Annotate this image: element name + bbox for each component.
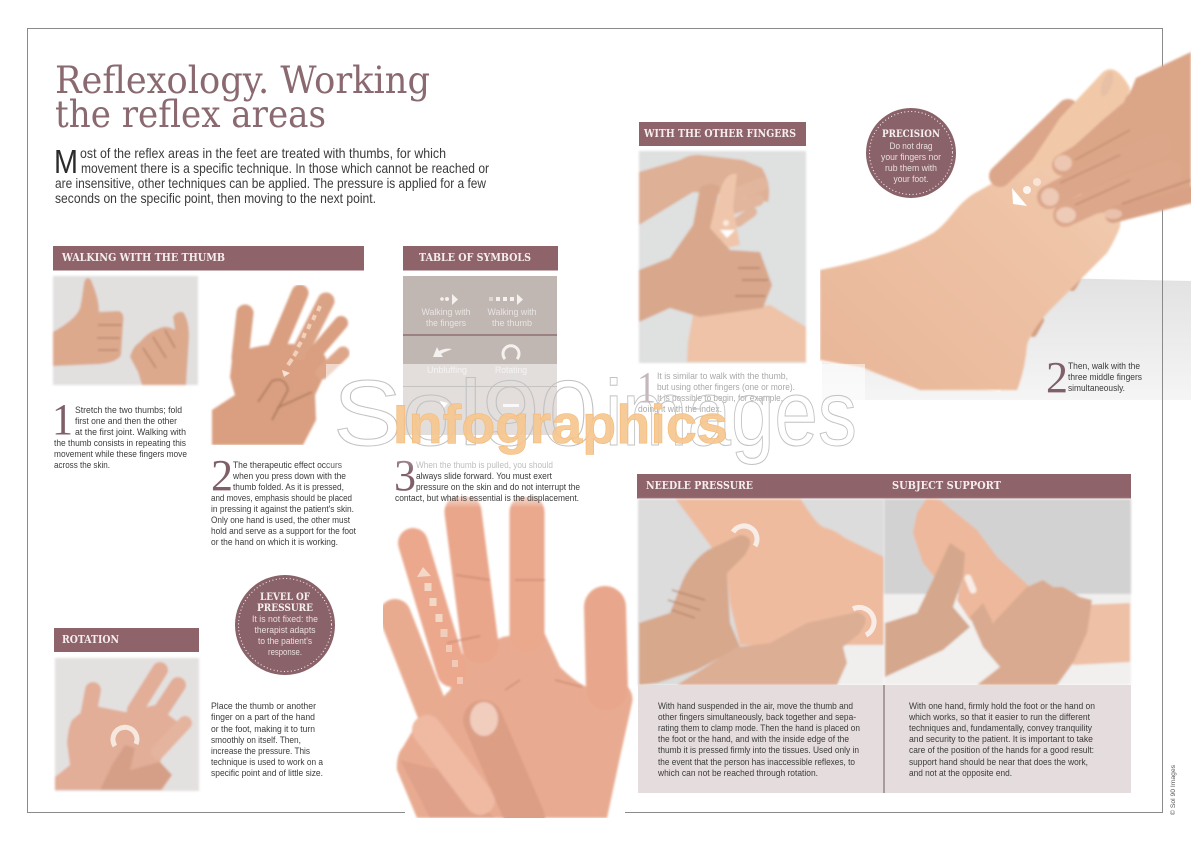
step 2: walk with the three middle fingers: three middle fingers xyxy=(1068,372,1142,383)
step 1: stretch the thumbs: 1 xyxy=(52,395,73,444)
step 1: stretch the thumbs: at the first joint. Walking with xyxy=(75,427,186,438)
callout: level of pressure: PRESSURE xyxy=(257,603,313,614)
heading: table of symbols xyxy=(403,246,558,270)
intro text block: movement there is a specific technique. In those which cannot be reached or xyxy=(81,161,489,176)
panel: table of symbols xyxy=(403,276,557,435)
label: walking with the thumb: the thumb xyxy=(492,318,532,329)
callout: level of pressure: therapist adapts xyxy=(254,625,316,636)
heading: with the other fingers xyxy=(639,122,806,146)
callout: precision xyxy=(866,108,956,198)
callout: level of pressure xyxy=(235,575,335,675)
watermark: Sol90 images Infographics: images xyxy=(605,361,857,465)
heading bar: needle pressure and subject support xyxy=(637,474,1131,498)
photo: thumb walking on the palm xyxy=(212,293,343,445)
label: unbluffing: Unbluffing xyxy=(427,365,467,376)
label: walking with the fingers: Walking with xyxy=(422,307,470,318)
photo: subject support xyxy=(884,498,1131,685)
step 3: when the thumb is pulled: 3 xyxy=(394,451,416,500)
title xyxy=(55,59,430,136)
step 2: therapeutic effect: Only one hand is used, the other must xyxy=(211,515,350,526)
step 1: stretch the thumbs: the thumb consists in repeating this xyxy=(54,438,186,449)
step 3: when the thumb is pulled: When the thumb is pulled, you should xyxy=(416,460,553,471)
rotation text: finger on a part of the hand xyxy=(211,712,315,723)
callout: level of pressure: to the patient's xyxy=(258,636,312,647)
step 2: therapeutic effect: when you press down with the xyxy=(232,471,346,482)
photo: walking with the other fingers xyxy=(639,151,806,363)
step 3: when the thumb is pulled: always slide forward. You must exert xyxy=(416,471,552,482)
panel: needle pressure text: the foot or the hand, and with the inside edge of the xyxy=(658,734,849,745)
step 2: therapeutic effect: and moves, emphasis should be placed xyxy=(211,493,352,504)
rotation text: technique is used to work on a xyxy=(211,757,324,768)
photo: large foot with three fingers xyxy=(820,52,1191,390)
step 2: therapeutic effect xyxy=(211,451,356,548)
callout: precision: PRECISION xyxy=(882,129,940,140)
photo: rotation on the palm xyxy=(55,658,199,791)
step 1: stretch the thumbs: Stretch the two thumbs; fold xyxy=(75,405,182,416)
panel: subject support text: and security to the patient. It is important to take xyxy=(909,734,1093,745)
step 2: therapeutic effect: or the hand on which it is working. xyxy=(211,537,338,548)
heading bar: needle pressure and subject support: SUBJECT SUPPORT xyxy=(892,478,1001,492)
step 1: stretch the thumbs xyxy=(52,395,187,471)
title: the reflex areas xyxy=(55,93,326,136)
panel: needle pressure text: the event that the person has inaccessible reflexes, to xyxy=(658,757,855,768)
title: Reflexology. Working xyxy=(55,59,430,102)
intro text block xyxy=(54,143,489,206)
rotation text: specific point and of little size. xyxy=(211,768,323,779)
icon: unbluffing arrow xyxy=(433,347,452,357)
panel: subject support text: and not at the opposite end. xyxy=(909,768,1012,779)
photo: towel under the large foot xyxy=(822,278,1191,400)
step 3: when the thumb is pulled: contact, but what is essential is the displacement. xyxy=(395,493,579,504)
label: walking with the fingers xyxy=(422,307,470,329)
callout: precision: Do not drag xyxy=(890,141,932,152)
step 1: similar to walking with the thumb: doing it with the index. xyxy=(638,404,722,415)
callout: level of pressure: It is not fixed: the xyxy=(252,614,318,625)
label: walking with the thumb xyxy=(488,307,536,329)
heading: rotation: ROTATION xyxy=(62,632,119,646)
step 2: therapeutic effect: 2 xyxy=(211,451,233,500)
watermark: Sol90 images Infographics: Infographics xyxy=(393,393,728,455)
watermark: Sol90 images Infographics xyxy=(333,361,857,465)
label: walking with the fingers: the fingers xyxy=(426,318,466,329)
intro text block: ost of the reflex areas in the feet are treated with thumbs, for which xyxy=(80,146,446,161)
panel: needle pressure text: which can not be reached through rotation. xyxy=(657,768,818,779)
icon: arrow on the palm xyxy=(282,306,320,377)
icon: arrow on the foot xyxy=(1012,178,1041,206)
icon: pressure marks xyxy=(733,526,874,635)
label: rotating: Rotating xyxy=(495,365,527,376)
step 2: walk with the three middle fingers: simultaneously. xyxy=(1068,383,1125,394)
credit: © Sol 90 Images xyxy=(1169,764,1177,815)
step 2: walk with the three middle fingers: Then, walk with the xyxy=(1068,361,1140,372)
panel: subject support text: With one hand, firmly hold the foot or the hand on xyxy=(909,701,1095,712)
photo: two thumbs folded xyxy=(53,276,198,385)
panel: subject support text: techniques and, fundamentally, convey tranquility xyxy=(909,723,1092,734)
intro text block: seconds on the specific point, then moving to the next point. xyxy=(55,191,376,206)
step 3: when the thumb is pulled: pressure on the skin and do not interrupt the xyxy=(416,482,580,493)
step 1: similar to walking with the thumb: but using other fingers (one or more). xyxy=(657,382,795,393)
step 1: stretch the thumbs: across the skin. xyxy=(54,460,110,471)
callout: level of pressure: response. xyxy=(268,647,302,658)
step 2: therapeutic effect: hold and serve as a support for the foot xyxy=(211,526,356,537)
panel: subject support text: care of the position of the hands for a good result: xyxy=(909,745,1094,756)
panel: needle pressure text xyxy=(638,685,884,793)
callout: precision: your foot. xyxy=(894,174,928,185)
panel: needle pressure text: rating them to clamp mode. Then the hand is placed on xyxy=(658,723,860,734)
intro text block: are insensitive, other techniques can be applied. The pressure is applied for a few xyxy=(55,176,486,191)
step 1: similar to walking with the thumb: It is possible to begin, for example, xyxy=(657,393,783,404)
step 1: stretch the thumbs: first one and then the other xyxy=(75,416,178,427)
panel: subject support text xyxy=(884,685,1131,793)
step 2: therapeutic effect: in pressing it against the patient's skin. xyxy=(211,504,354,515)
icon: rotating arrow xyxy=(503,346,519,359)
photo: needle pressure xyxy=(638,498,884,685)
panel: needle pressure text: With hand suspended in the air, move the thumb and xyxy=(658,701,853,712)
step 2: therapeutic effect: The therapeutic effect occurs xyxy=(233,460,342,471)
panel: needle pressure text: other fingers simultaneously, back together and sepa- xyxy=(658,712,856,723)
panel: needle pressure text: thumb it is pressed firmly into the tissues. Used only in xyxy=(658,745,859,756)
step 1: stretch the thumbs: movement while these fingers move xyxy=(54,449,187,460)
icon: walking with the fingers arrow xyxy=(440,294,458,305)
icon: walking with the thumb arrow xyxy=(489,294,523,305)
icon: lower symbols xyxy=(440,401,519,409)
callout: level of pressure: LEVEL OF xyxy=(260,592,310,603)
step 1: similar to walking with the thumb: It is similar to walk with the thumb, xyxy=(657,371,788,382)
heading: walking with the thumb xyxy=(53,246,364,270)
rotation text: increase the pressure. This xyxy=(211,746,310,757)
panel: subject support text: which works, so that it easier to run the different xyxy=(908,712,1090,723)
watermark veil xyxy=(326,364,865,474)
step 2: walk with the three middle fingers xyxy=(1046,353,1142,402)
watermark: Sol90 images Infographics: Sol90 xyxy=(333,361,597,465)
heading: rotation xyxy=(54,628,199,652)
callout: precision: your fingers nor xyxy=(881,152,942,163)
step 1: similar to walking with the thumb: 1 xyxy=(637,363,656,412)
label: walking with the thumb: Walking with xyxy=(488,307,536,318)
heading: table of symbols: TABLE OF SYMBOLS xyxy=(419,250,531,264)
icon: rotation arrow xyxy=(113,727,137,746)
step 2: therapeutic effect: thumb folded. As it is pressed, xyxy=(233,482,344,493)
rotation text: smoothly on itself. Then, xyxy=(211,735,301,746)
photo: large hand with thumb walking on the finger xyxy=(395,512,632,818)
step 3: when the thumb is pulled xyxy=(394,451,580,504)
heading: with the other fingers: WITH THE OTHER FINGERS xyxy=(643,126,796,140)
rotation text xyxy=(211,701,324,779)
heading bar: needle pressure and subject support: NEEDLE PRESSURE xyxy=(646,478,753,492)
step 1: similar to walking with the thumb xyxy=(637,363,795,415)
intro text block: M xyxy=(54,143,78,180)
panel: subject support text: support hand should be near that does the work, xyxy=(909,757,1088,768)
icon: arrow on the finger xyxy=(417,567,463,684)
rotation text: Place the thumb or another xyxy=(211,701,317,712)
step 2: walk with the three middle fingers: 2 xyxy=(1046,353,1068,402)
rotation text: or the foot, making it to turn xyxy=(211,724,315,735)
callout: precision: rub them with xyxy=(885,163,937,174)
heading: walking with the thumb: WALKING WITH THE THUMB xyxy=(61,250,225,264)
